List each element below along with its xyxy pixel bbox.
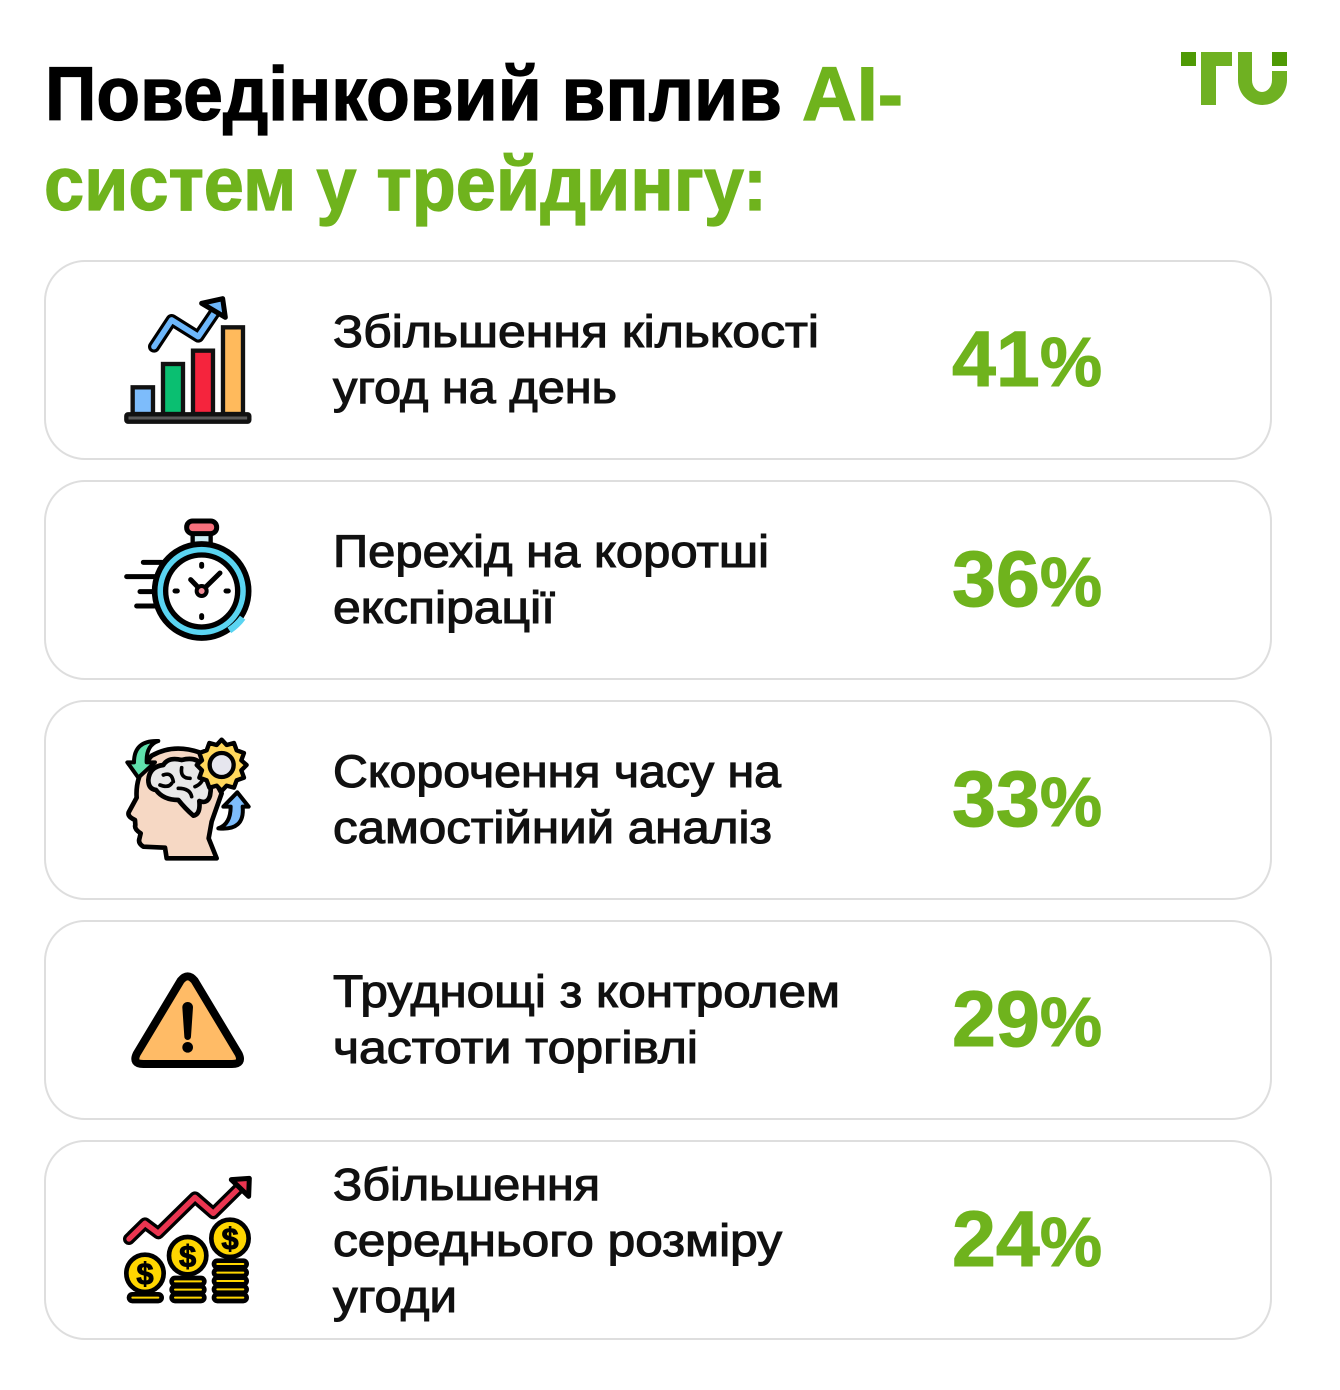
logo: [1181, 52, 1287, 105]
label: угоди: [333, 1271, 457, 1322]
label: [333, 1159, 783, 1322]
icon: warning triangle: [135, 976, 240, 1064]
label: частоти торгівлі: [333, 1022, 698, 1073]
value: 24%: [952, 1194, 1102, 1283]
label: Перехід на коротші: [333, 526, 769, 577]
icon: coin stacks with rising arrow: $: [221, 1222, 239, 1256]
value: 36%: [952, 534, 1102, 623]
icon: coin stacks with rising arrow: $: [136, 1257, 154, 1291]
title: систем у трейдингу:: [44, 142, 767, 227]
panel: more trades per day: [45, 261, 1271, 459]
value: 33%: [952, 754, 1102, 843]
icon: stopwatch: [127, 521, 249, 638]
label: [333, 306, 819, 413]
title: AI-: [802, 52, 903, 137]
label: угод на день: [333, 362, 617, 413]
icon: head with brain and gear: [127, 740, 249, 858]
panel: shorter expirations: [45, 481, 1271, 679]
value: 29%: [952, 974, 1102, 1063]
icon: coin stacks with rising arrow: $: [179, 1239, 196, 1273]
title: Поведінковий вплив: [45, 52, 782, 137]
label: Скорочення часу на: [333, 746, 782, 797]
title: [44, 52, 903, 227]
label: експірації: [333, 582, 556, 633]
label: [333, 746, 782, 853]
label: Збільшення кількості: [333, 306, 819, 357]
panel: less independent analysis time: [45, 701, 1271, 899]
label: Труднощі з контролем: [333, 966, 840, 1017]
label: [333, 526, 769, 633]
icon: bar chart with rising arrow: [126, 299, 249, 422]
panel: larger average trade size: [45, 1141, 1271, 1339]
value: 41%: [952, 314, 1102, 403]
label: самостійний аналіз: [333, 802, 772, 853]
label: середнього розміру: [333, 1215, 783, 1266]
label: Збільшення: [333, 1159, 600, 1210]
icon: coin stacks with rising arrow: [126, 1178, 249, 1301]
label: [333, 966, 840, 1073]
panel: trade frequency control difficulty: [45, 921, 1271, 1119]
